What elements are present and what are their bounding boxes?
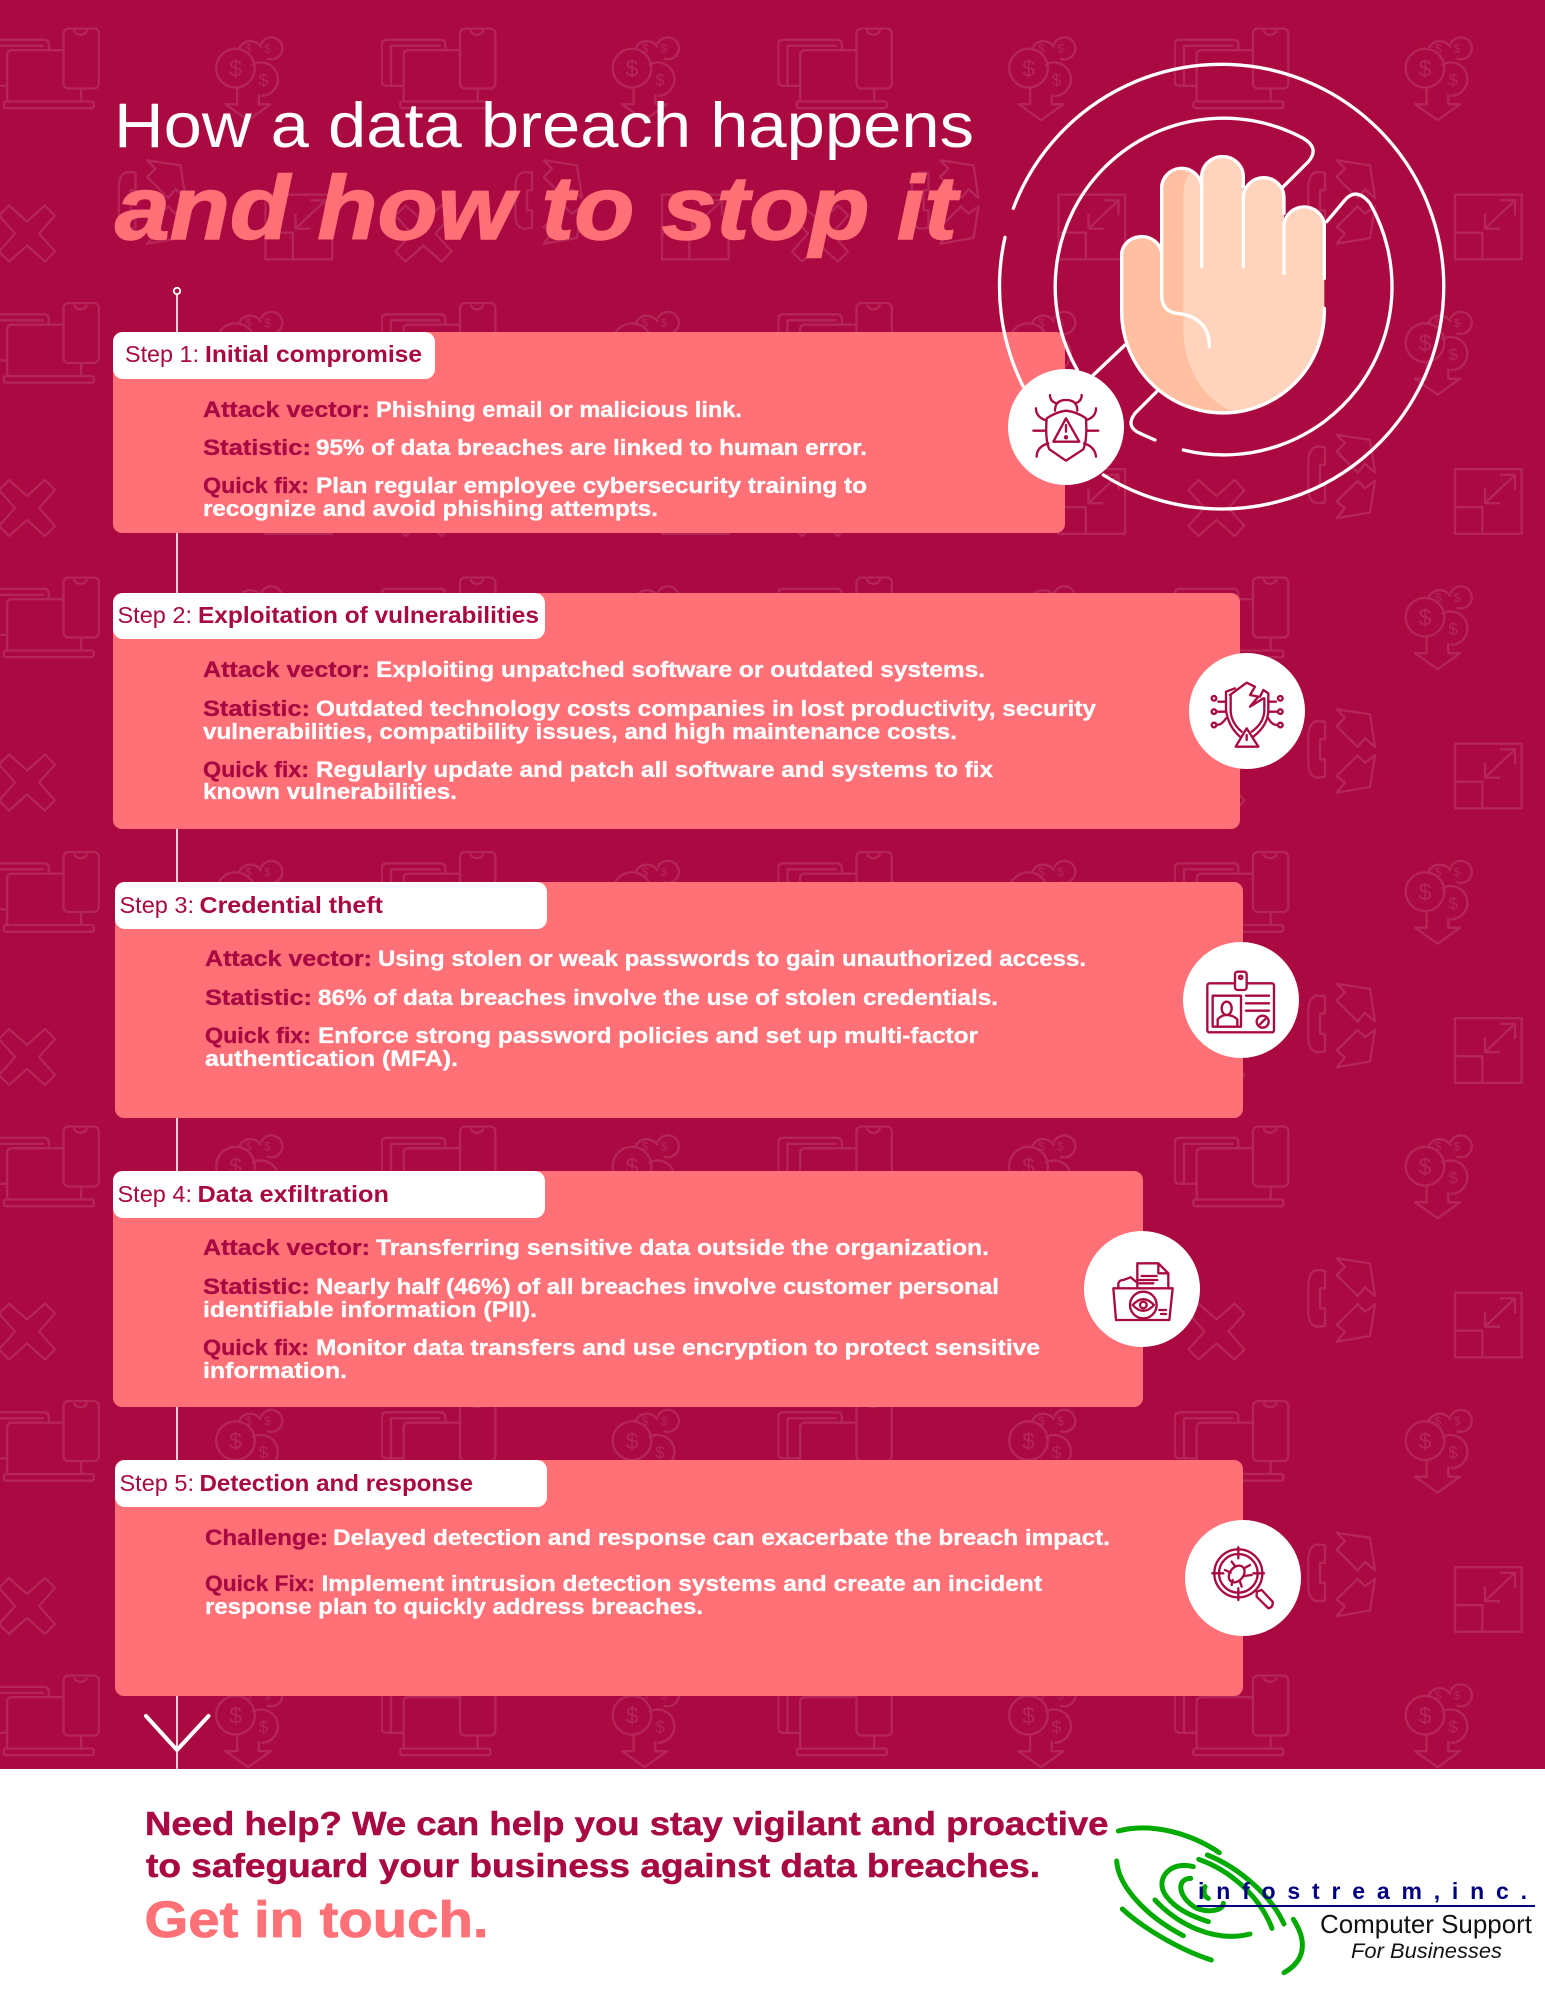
- step 4 details: Monitor data transfers and use encryption to protect sensitive: [316, 1335, 1040, 1360]
- step 3 details: Using stolen or weak passwords to gain unauthorized access.: [378, 946, 1086, 971]
- step 1 details: Statistic:: [203, 435, 311, 460]
- step 3 details: authentication (MFA).: [205, 1046, 458, 1071]
- call to action: Need help? We can help you stay vigilant and proactive: [145, 1806, 1108, 1843]
- arrow: timeline end chevron: [146, 1716, 208, 1750]
- step 4 heading: Step 4:: [118, 1181, 192, 1207]
- logo: infostream: infostream,inc.: [1198, 1878, 1527, 1904]
- step 4 details: information.: [203, 1358, 347, 1383]
- step 2 details: vulnerabilities, compatibility issues, and high maintenance costs.: [203, 719, 957, 744]
- step 3 details: Attack vector:: [205, 946, 372, 971]
- title: [114, 91, 974, 259]
- step 1 heading: Step 1:: [125, 341, 199, 367]
- illustration: stop hand in rings: [999, 64, 1444, 509]
- step 3 details: Quick fix:: [205, 1023, 311, 1048]
- step 2 details: Exploiting unpatched software or outdated systems.: [376, 657, 985, 682]
- step 2 details: known vulnerabilities.: [203, 779, 457, 804]
- step 4 heading: [113, 1171, 545, 1218]
- step 1 details: [203, 397, 867, 521]
- step 4 details: Nearly half (46%) of all breaches involve customer personal: [316, 1274, 999, 1299]
- step 5 details: response plan to quickly address breaches.: [205, 1594, 703, 1619]
- step 4 details: [203, 1235, 1040, 1383]
- step 5 details: [205, 1525, 1110, 1619]
- panel: step 3: [115, 882, 1243, 1118]
- step 3 heading: [115, 882, 547, 929]
- panel: step 4: [113, 1171, 1143, 1407]
- step 2 heading: Exploitation of vulnerabilities: [198, 602, 539, 628]
- step 3 details: [205, 946, 1086, 1071]
- step 2 heading: [113, 593, 545, 639]
- step 1 details: Attack vector:: [203, 397, 370, 422]
- title: and how to stop it: [115, 159, 961, 259]
- step 4 details: Statistic:: [203, 1274, 310, 1299]
- step 2 details: Attack vector:: [203, 657, 370, 682]
- step 1 details: Plan regular employee cybersecurity training to: [316, 473, 867, 498]
- icon: id badge: [1183, 942, 1299, 1058]
- step 1 heading: [113, 332, 435, 379]
- step 1 details: 95% of data breaches are linked to human error.: [316, 435, 867, 460]
- logo: infostream: For Businesses: [1351, 1940, 1503, 1963]
- step 2 details: Quick fix:: [203, 757, 309, 782]
- step 4 heading: Data exfiltration: [198, 1181, 389, 1207]
- step 2 details: Statistic:: [203, 696, 310, 721]
- panel: footer: [0, 1769, 1545, 2000]
- step 3 heading: Credential theft: [200, 892, 383, 918]
- step 4 details: Quick fix:: [203, 1335, 309, 1360]
- call to action: to safeguard your business against data breaches.: [146, 1848, 1040, 1885]
- icon: broken shield: [1189, 653, 1305, 769]
- step 3 details: 86% of data breaches involve the use of stolen credentials.: [318, 985, 998, 1010]
- step 2 details: Regularly update and patch all software and systems to fix: [316, 757, 994, 782]
- step 4 details: Attack vector:: [203, 1235, 370, 1260]
- icon: bug under magnifier: [1185, 1520, 1301, 1636]
- title: How a data breach happens: [114, 91, 974, 161]
- step 3 heading: Step 3:: [120, 892, 194, 918]
- step 5 details: Implement intrusion detection systems and create an incident: [322, 1571, 1043, 1596]
- step 1 details: Quick fix:: [203, 473, 309, 498]
- step 2 details: [203, 657, 1097, 804]
- timeline connector line: [174, 288, 180, 1769]
- step 5 heading: [115, 1460, 547, 1507]
- step 1 details: Phishing email or malicious link.: [376, 397, 742, 422]
- step 3 details: Statistic:: [205, 985, 312, 1010]
- call to action: [144, 1806, 1108, 1948]
- step 5 heading: Detection and response: [200, 1470, 473, 1496]
- logo: infostream: [1117, 1828, 1535, 1973]
- call to action: Get in touch.: [144, 1891, 488, 1948]
- step 5 details: Challenge:: [205, 1525, 328, 1550]
- icon: folder with eye: [1084, 1231, 1200, 1347]
- step 3 details: Enforce strong password policies and set up multi-factor: [318, 1023, 978, 1048]
- step 5 heading: Step 5:: [120, 1470, 194, 1496]
- step 2 heading: Step 2:: [118, 602, 192, 628]
- step 4 details: Transferring sensitive data outside the organization.: [376, 1235, 989, 1260]
- step 4 details: identifiable information (PII).: [203, 1297, 537, 1322]
- step 2 details: Outdated technology costs companies in lost productivity, security: [316, 696, 1097, 721]
- step 1 heading: Initial compromise: [205, 341, 422, 367]
- logo: infostream: Computer Support: [1320, 1909, 1533, 1939]
- panel: step 1: [113, 332, 1065, 533]
- panel: step 5: [115, 1460, 1243, 1696]
- step 5 details: Quick Fix:: [205, 1571, 315, 1596]
- step 1 details: recognize and avoid phishing attempts.: [203, 496, 658, 521]
- step 5 details: Delayed detection and response can exacerbate the breach impact.: [333, 1525, 1110, 1550]
- icon: bug with alert: [1008, 369, 1124, 485]
- panel: step 2: [113, 593, 1240, 829]
